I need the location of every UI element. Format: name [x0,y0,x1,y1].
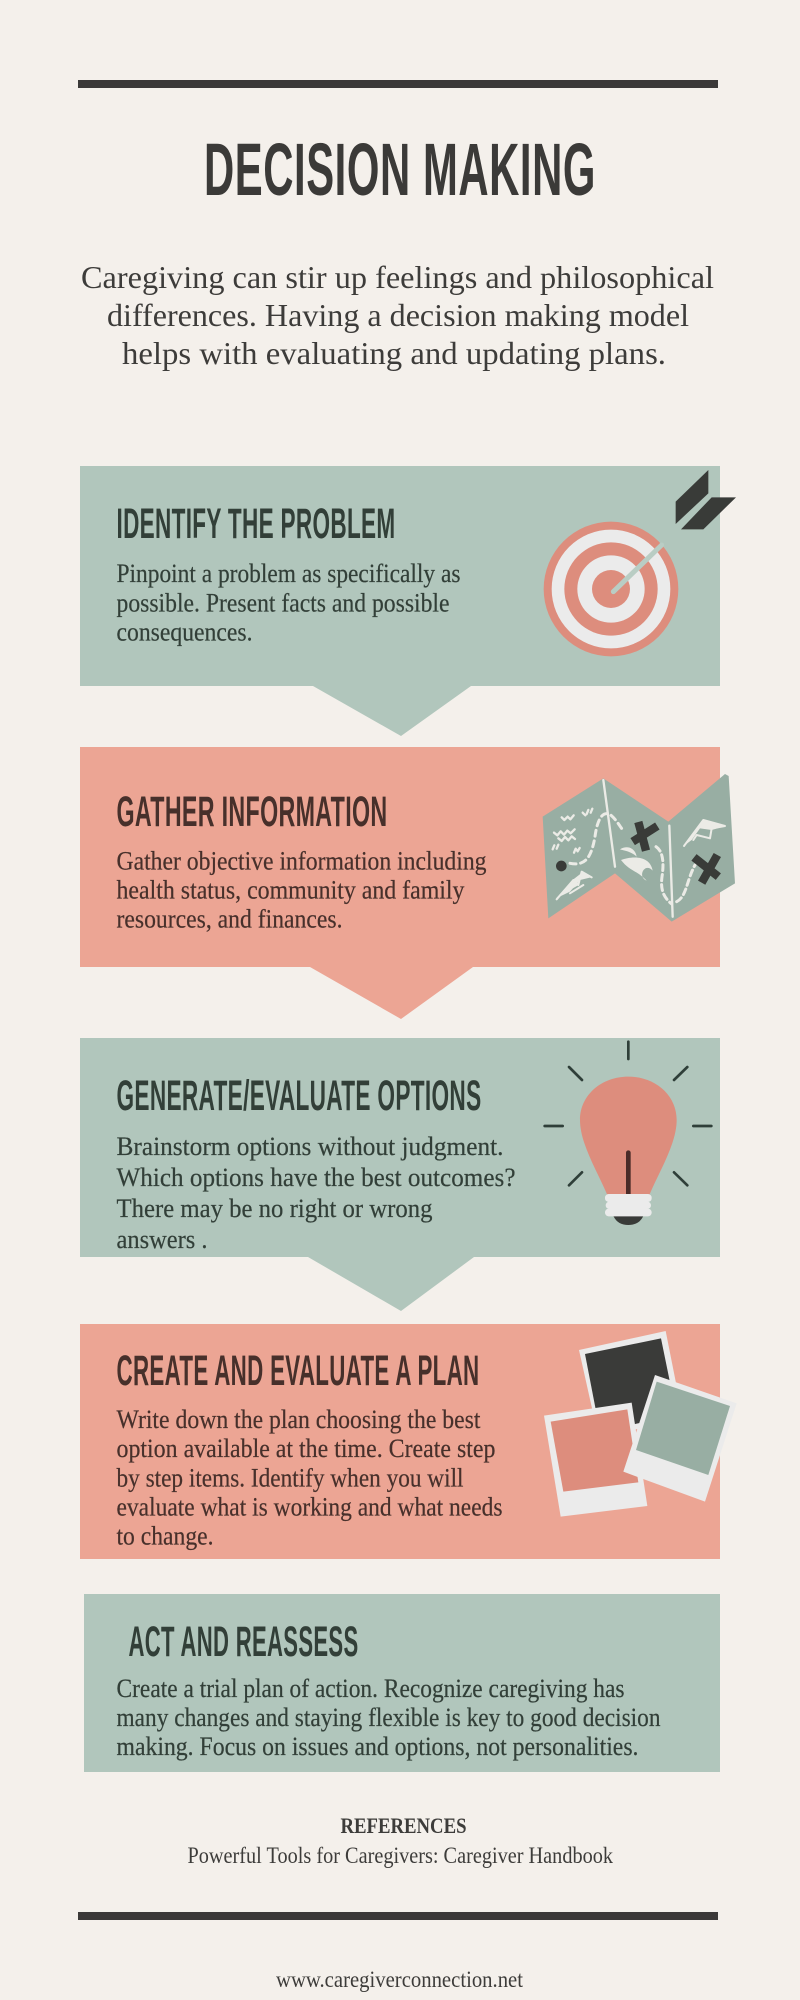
panel: identify the problem [80,466,736,736]
panel 1 heading: IDENTIFY THE PROBLEM [116,500,396,548]
panel: gather information [80,747,735,1019]
panel 3 body text: answers . [116,1225,208,1254]
bottom rule [78,1912,718,1920]
panel 5 background [84,1594,720,1772]
panel 1 body text [116,559,460,646]
panel 2 background [80,747,720,1019]
panel 4 background [80,1324,720,1559]
panel 4 body text: option available at the time. Create step [116,1434,496,1463]
panel 4 body text: Write down the plan choosing the best [116,1405,481,1434]
icon: polaroid photos [544,1331,737,1517]
panel 5 body text: making. Focus on issues and options, not personalities. [116,1732,638,1761]
panel 3 body text: Brainstorm options without judgment. [116,1132,504,1161]
panel 1 background [80,466,720,736]
icon: target with arrow [544,470,736,656]
panel 3 body text [116,1132,516,1254]
website footer: www.caregiverconnection.net [276,1967,524,1992]
panel 1 body text: possible. Present facts and possible [116,588,450,618]
icon: folded map [543,774,735,922]
intro text: differences. Having a decision making model [107,297,689,333]
panel 4 body text: by step items. Identify when you will [116,1464,464,1492]
references: Powerful Tools for Caregivers: Caregiver Handbook [188,1843,613,1868]
panel 2 body text: health status, community and family [116,876,464,904]
panel 2 body text: Gather objective information including [116,846,486,876]
panel: generate and evaluate options [80,1038,720,1311]
panel 4 body text: to change. [116,1522,214,1550]
intro text: helps with evaluating and updating plans. [122,335,666,371]
intro text [81,259,714,371]
panel 2 heading: GATHER INFORMATION [116,788,388,836]
top rule [78,80,718,88]
panel 4 heading: CREATE AND EVALUATE A PLAN [116,1347,480,1395]
intro text: Caregiving can stir up feelings and philosophical [81,259,714,295]
panel 4 body text [116,1405,502,1550]
panel 3 body text: Which options have the best outcomes? [116,1163,516,1192]
panel: create and evaluate a plan [80,1324,737,1559]
panel 2 body text [116,846,486,934]
panel 5 heading: ACT AND REASSESS [128,1618,358,1666]
panel 3 heading: GENERATE/EVALUATE OPTIONS [116,1072,482,1120]
references: REFERENCES [340,1813,466,1838]
icon: light bulb [545,1042,711,1225]
panel 1 body text: consequences. [116,618,252,646]
panel: act and reassess [84,1594,720,1772]
panel 2 body text: resources, and finances. [116,904,342,934]
panel 5 body text: many changes and staying flexible is key to good decision [116,1703,660,1732]
panel 5 body text [116,1674,660,1761]
panel 1 body text: Pinpoint a problem as specifically as [116,559,460,588]
panel 3 body text: There may be no right or wrong [116,1194,432,1223]
panel 4 body text: evaluate what is working and what needs [116,1492,502,1522]
references [188,1813,613,1868]
panel 3 background [80,1038,720,1311]
panel 5 body text: Create a trial plan of action. Recognize caregiving has [116,1674,624,1703]
